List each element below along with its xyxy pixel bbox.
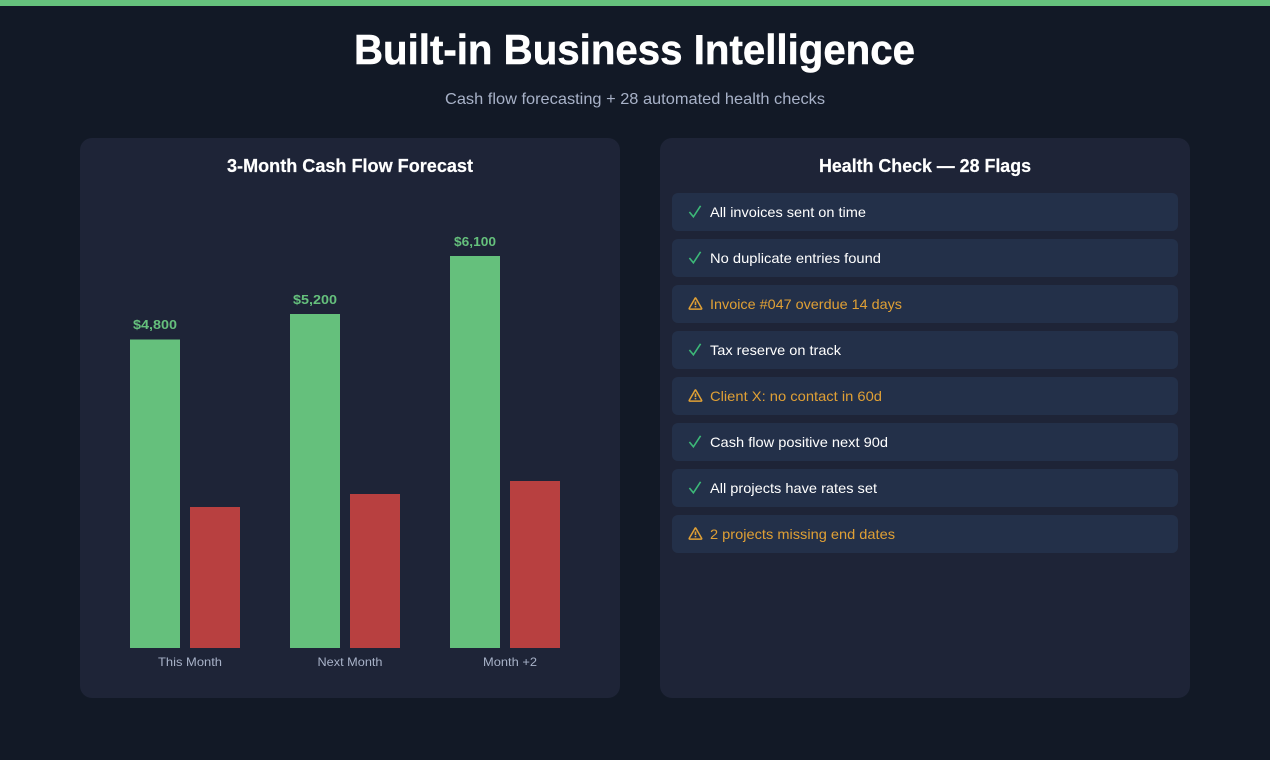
- subtitle: Cash flow forecasting + 28 automated health checks: [445, 91, 825, 108]
- check row: invoices sent: All invoices sent on time: [710, 204, 866, 220]
- check row: invoices sent: [672, 193, 1178, 231]
- bar group: this month: This Month: [158, 655, 222, 669]
- bar group: this month: [130, 317, 240, 669]
- warning row: missing end dates: 2 projects missing end dates: [710, 526, 895, 542]
- bar group: this month: $4,800: [133, 317, 177, 332]
- heading: health check: Health Check — 28 Flags: [819, 156, 1031, 176]
- bar group: next month: [290, 292, 400, 669]
- panel: cash flow forecast: [80, 138, 620, 698]
- warning row: client contact: Client X: no contact in 60d: [710, 388, 882, 404]
- check row: no duplicates: [672, 239, 1178, 277]
- bar group: next month: Next Month: [318, 655, 382, 669]
- check row: cash flow: Cash flow positive next 90d: [710, 434, 888, 450]
- bar group: month +2: $6,100: [454, 234, 496, 249]
- panel: health check: [660, 138, 1190, 698]
- warning row: overdue invoice: [672, 285, 1178, 323]
- heading: forecast: 3-Month Cash Flow Forecast: [227, 156, 473, 176]
- check row: no duplicates: No duplicate entries found: [710, 250, 881, 266]
- warning row: client contact: [672, 377, 1178, 415]
- bar chart: [130, 234, 560, 669]
- bar group: next month: $5,200: [293, 292, 337, 307]
- check row: tax reserve: Tax reserve on track: [710, 342, 842, 358]
- check row: cash flow: [672, 423, 1178, 461]
- check row: project rates: All projects have rates set: [710, 480, 877, 496]
- title: Built-in Business Intelligence: [354, 26, 915, 73]
- bar group: month +2: Month +2: [483, 655, 537, 669]
- check row: project rates: [672, 469, 1178, 507]
- warning row: overdue invoice: Invoice #047 overdue 14 days: [710, 296, 902, 312]
- warning row: missing end dates: [672, 515, 1178, 553]
- check row: tax reserve: [672, 331, 1178, 369]
- top accent bar: [0, 0, 1270, 6]
- bar group: month +2: [450, 234, 560, 669]
